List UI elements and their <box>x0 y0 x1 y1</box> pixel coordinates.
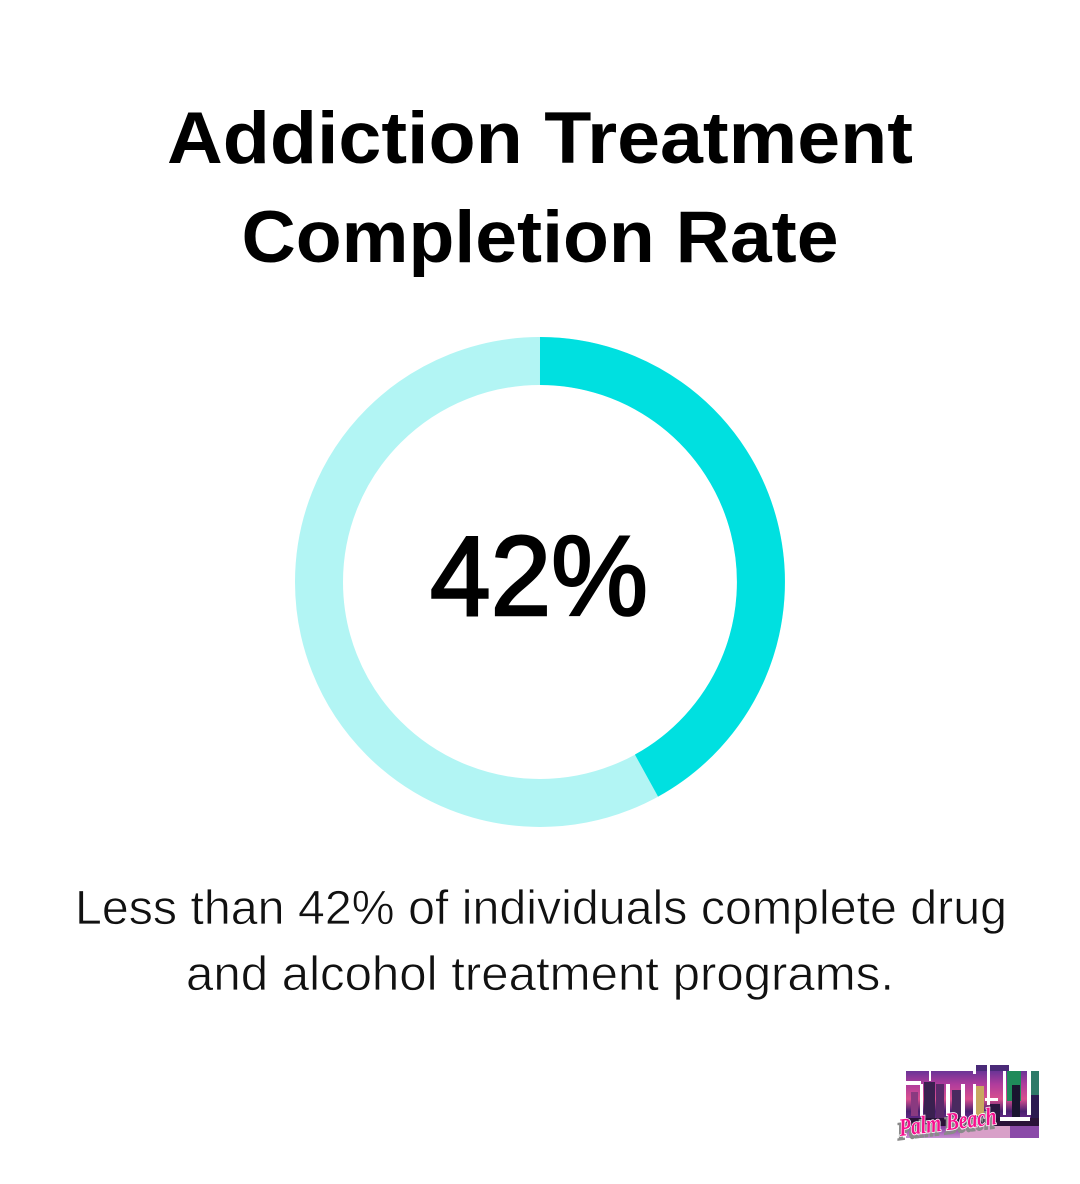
logo: amity Palm Beach <box>895 1065 1039 1146</box>
logo white letter cutouts <box>906 1065 1031 1121</box>
logo skyline image <box>906 1065 1039 1138</box>
donut value arc <box>540 361 761 776</box>
description text: Less than 42% of individuals complete drug <box>75 882 1007 935</box>
donut chart: 42% <box>319 361 761 803</box>
description text <box>75 882 1007 1001</box>
description text: and alcohol treatment programs. <box>186 948 894 1001</box>
logo script text: Palm Beach <box>897 1103 998 1142</box>
title: Addiction Treatment <box>167 98 913 179</box>
center value: 42% <box>430 513 648 639</box>
donut track <box>319 361 761 803</box>
title <box>167 98 913 278</box>
title: Completion Rate <box>242 197 838 278</box>
logo script shadow: Palm Beach <box>895 1107 996 1146</box>
